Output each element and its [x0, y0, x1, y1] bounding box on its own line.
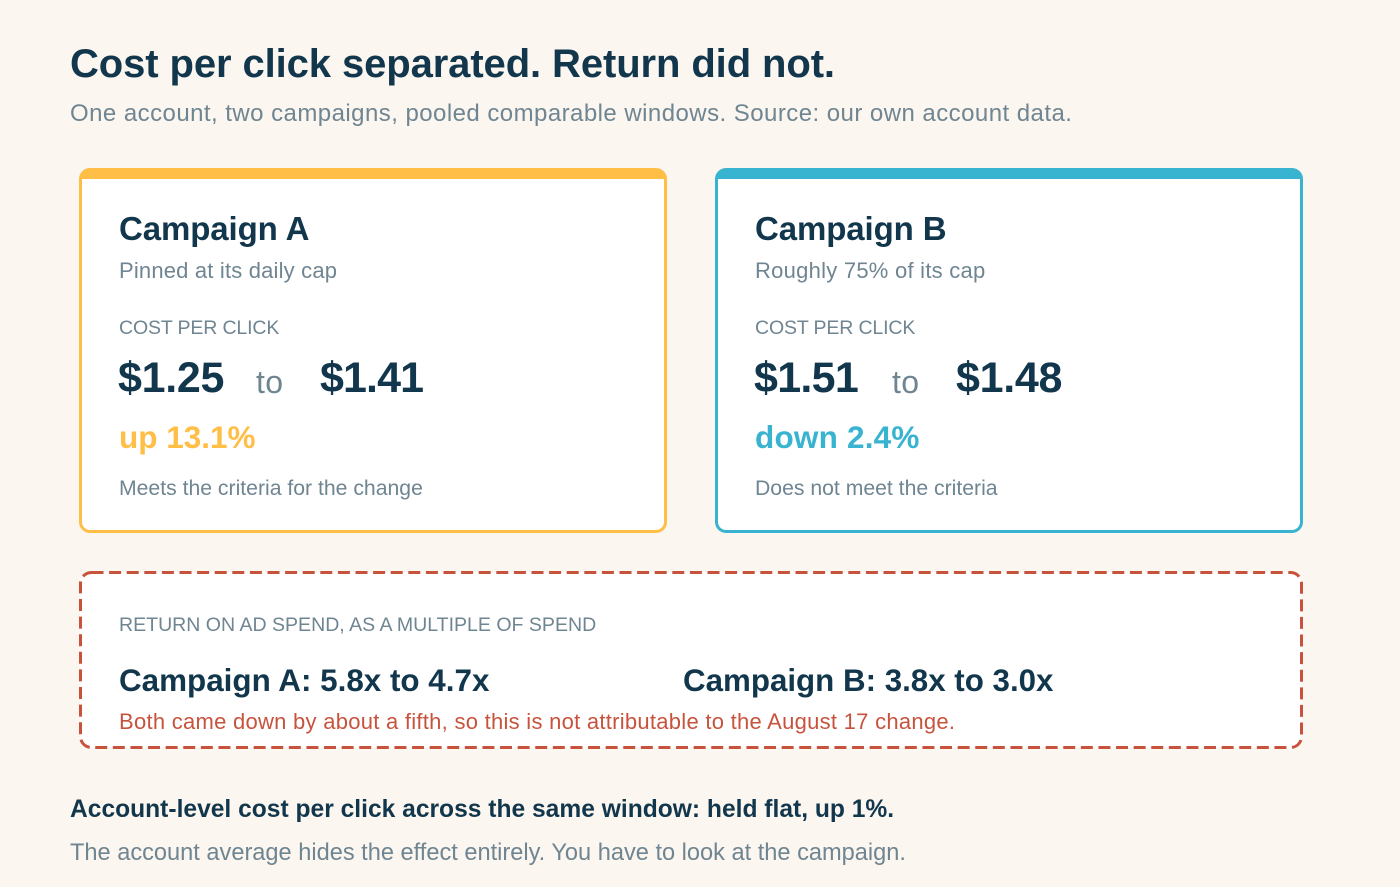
campaign B heading: Campaign B	[755, 210, 947, 247]
campaign A cost values	[118, 354, 423, 402]
campaign B change: down 2.4%	[755, 419, 920, 455]
account-level finding: Account-level cost per click across the same window: held flat, up 1%.	[70, 796, 894, 823]
campaign B verdict: Does not meet the criteria	[755, 477, 998, 500]
campaign A cost values: to	[256, 364, 283, 400]
campaign A heading: Campaign A	[119, 210, 309, 247]
campaign A cost values: $1.25	[118, 354, 224, 402]
return label: RETURN ON AD SPEND, AS A MULTIPLE OF SPEND	[119, 614, 596, 636]
panel: campaign A	[79, 168, 667, 533]
campaign A status: Pinned at its daily cap	[119, 258, 337, 283]
campaign B metric label: COST PER CLICK	[755, 317, 915, 339]
panel: campaign B	[715, 168, 1303, 533]
campaign A cost values: $1.41	[320, 354, 423, 402]
campaign B cost values: $1.51	[754, 354, 858, 402]
panel: return on ad spend	[79, 571, 1303, 749]
subtitle: One account, two campaigns, pooled comparable windows. Source: our own account data.	[70, 100, 1072, 127]
return note: Both came down by about a fifth, so this is not attributable to the August 17 change.	[119, 709, 955, 734]
campaign A return: Campaign A: 5.8x to 4.7x	[119, 663, 489, 698]
campaign B cost values	[754, 354, 1062, 402]
campaign B cost values: to	[892, 364, 919, 400]
account-level note: The account average hides the effect entirely. You have to look at the campaign.	[70, 840, 906, 866]
campaign B status: Roughly 75% of its cap	[755, 258, 986, 283]
campaign A change: up 13.1%	[119, 419, 256, 455]
campaign B return: Campaign B: 3.8x to 3.0x	[683, 663, 1053, 698]
campaign A metric label: COST PER CLICK	[119, 317, 279, 339]
campaign A verdict: Meets the criteria for the change	[119, 477, 423, 500]
title: Cost per click separated. Return did not.	[70, 42, 835, 86]
campaign B cost values: $1.48	[956, 354, 1062, 402]
